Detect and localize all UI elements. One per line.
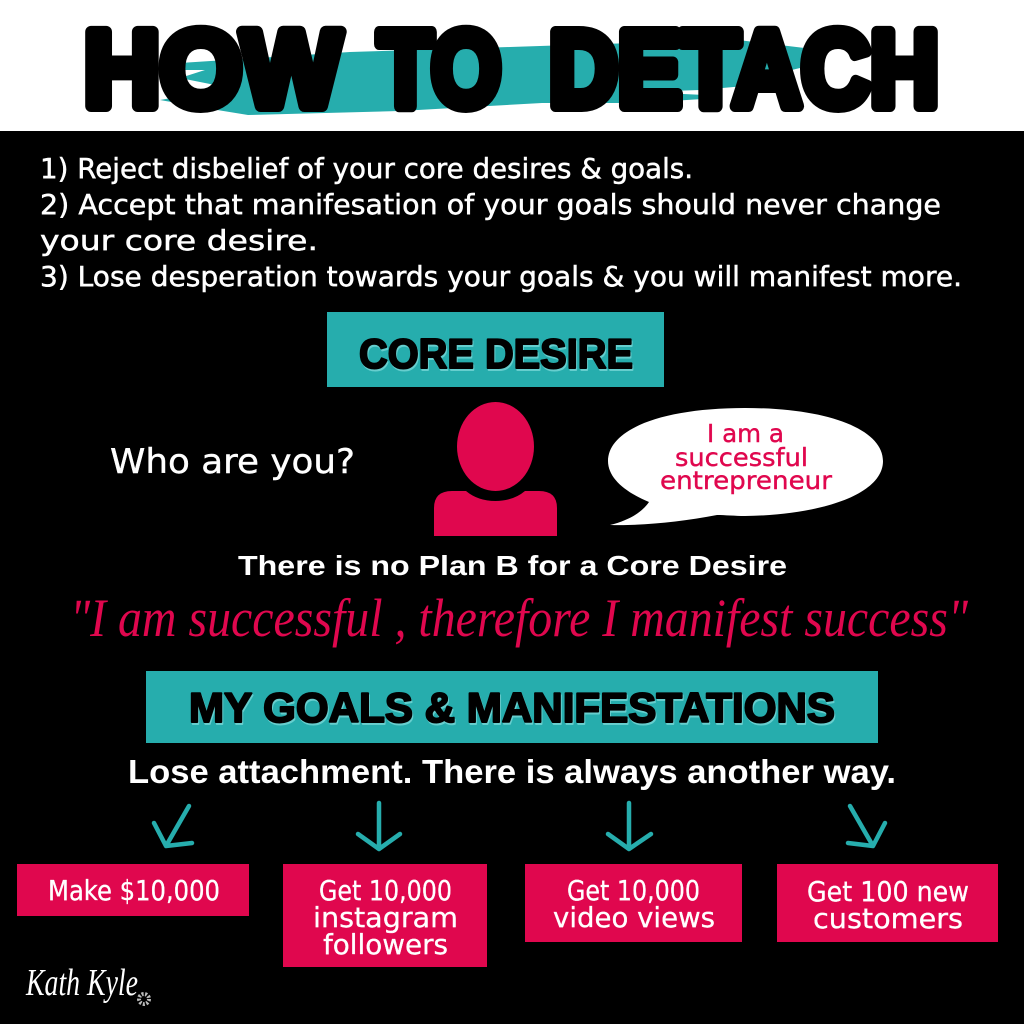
goal box: make money: Make $10,000: [48, 874, 220, 907]
arrow 2: [358, 803, 400, 849]
title banner: [0, 0, 1024, 131]
speech bubble: entrepreneur: [660, 466, 833, 495]
speech bubble: [608, 408, 883, 525]
teal brush stroke: [160, 40, 813, 115]
plan b statement: There is no Plan B for a Core Desire: [238, 550, 787, 581]
core desire heading: [327, 312, 664, 387]
numbered steps text block: 2) Accept that manifesation of your goals should never change: [40, 188, 941, 221]
goal box: make money: [17, 864, 249, 916]
goal box: video views: Get 10,000: [567, 874, 700, 907]
arrow 3: [608, 803, 651, 849]
icon: person: [434, 402, 557, 536]
numbered steps text block: 1) Reject disbelief of your core desires & goals.: [40, 152, 693, 185]
speech bubble: I am a: [707, 419, 784, 448]
speech bubble: successful: [675, 443, 808, 472]
arrow 4: [848, 806, 885, 846]
arrow 1: [154, 806, 192, 846]
title text: TO: [378, 8, 501, 129]
title text: HOW: [84, 8, 341, 129]
goal box: instagram followers: followers: [323, 928, 448, 961]
goal box: instagram followers: [283, 864, 487, 967]
title text: DETACH: [549, 8, 939, 129]
goal box: instagram followers: Get 10,000: [319, 874, 452, 907]
goal box: video views: video views: [553, 901, 715, 934]
numbered steps text block: [40, 152, 962, 293]
who are you question: Who are you?: [110, 442, 355, 482]
goals heading: MY GOALS & MANIFESTATIONS: [189, 684, 835, 731]
goal box: video views: [525, 864, 742, 942]
lose attachment line: Lose attachment. There is always another way.: [128, 753, 896, 790]
numbered steps text block: your core desire.: [40, 224, 318, 257]
numbered steps text block: 3) Lose desperation towards your goals & you will manifest more.: [40, 260, 962, 293]
goal box: instagram followers: instagram: [313, 901, 458, 934]
goal box: new customers: Get 100 new: [807, 875, 969, 908]
goals heading: [146, 671, 878, 743]
core desire heading: CORE DESIRE: [359, 330, 633, 377]
title text: [84, 8, 939, 129]
signature logo: Kath Kyle: [25, 962, 138, 1004]
goal box: new customers: customers: [813, 902, 963, 935]
goal box: new customers: [777, 864, 998, 942]
